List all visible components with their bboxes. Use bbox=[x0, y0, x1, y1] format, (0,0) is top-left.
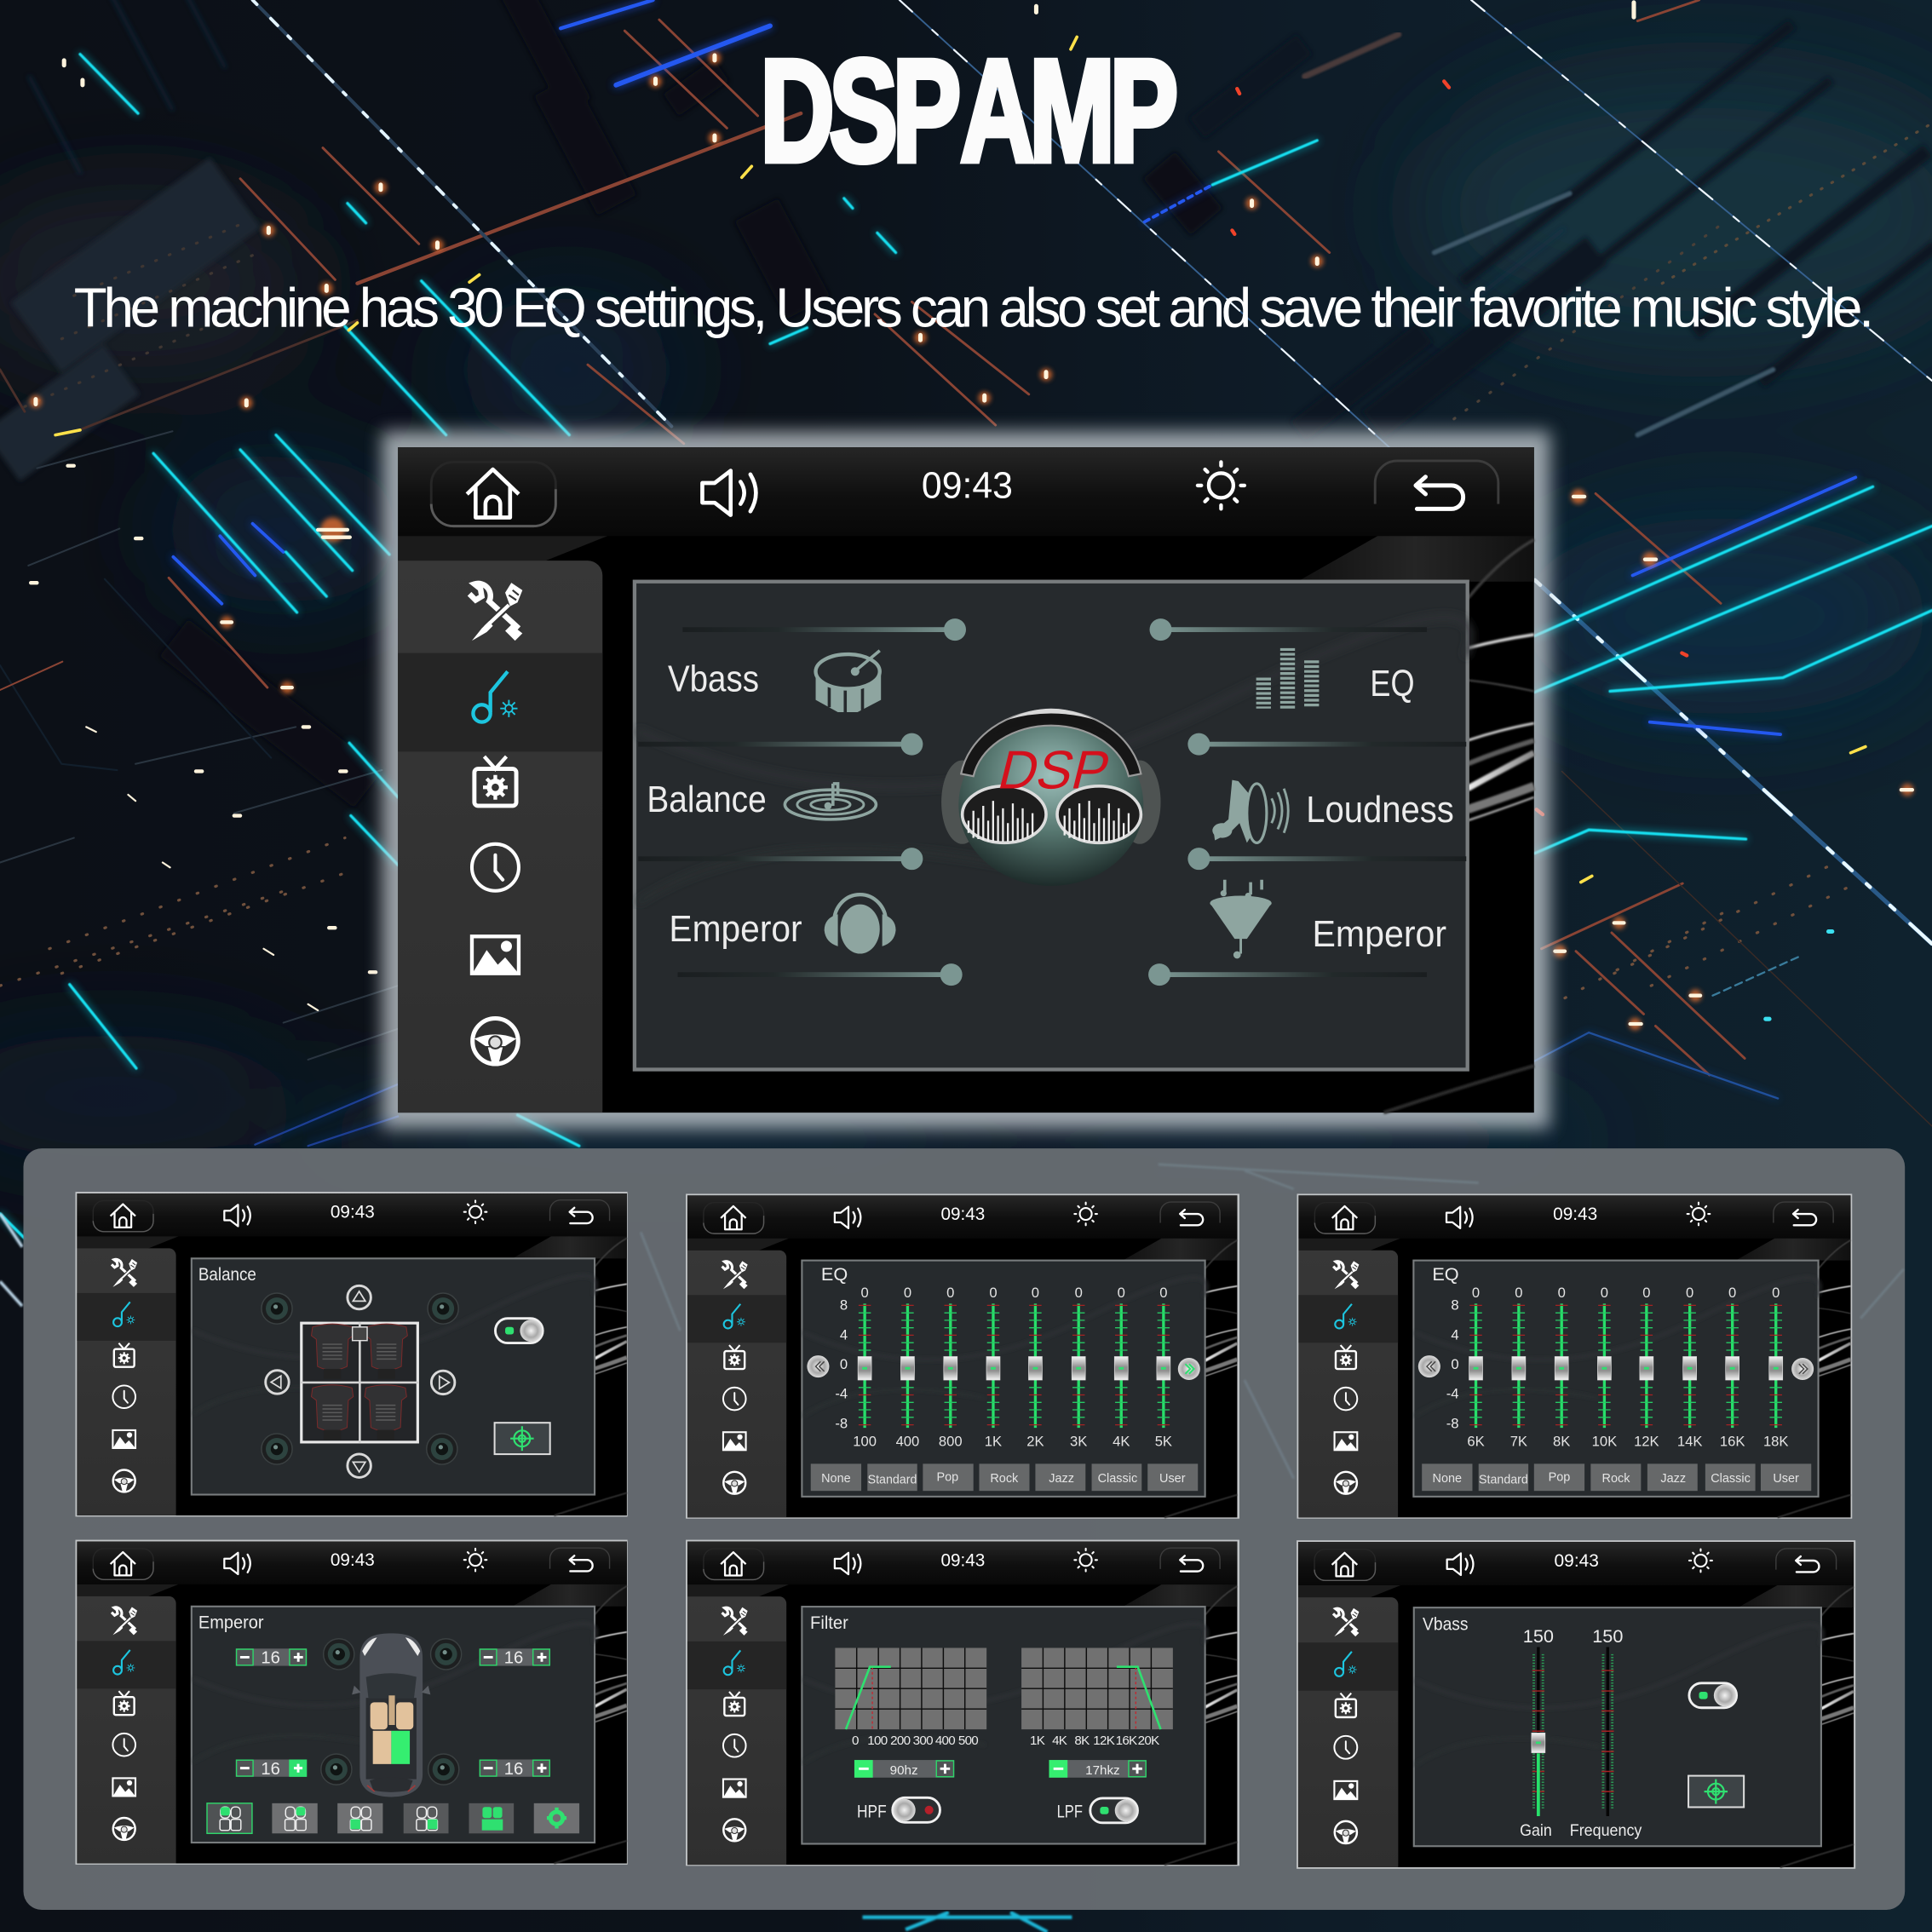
frequency labels: 3K bbox=[1070, 1433, 1087, 1449]
LPF stepper bbox=[1049, 1760, 1146, 1778]
screen: Filter bbox=[687, 1541, 1238, 1865]
band values: 0 bbox=[1075, 1285, 1083, 1301]
dotted copper rows bbox=[0, 124, 1932, 998]
page arrows bbox=[1418, 1355, 1814, 1380]
screen: Vbass: 09:43 bbox=[1555, 1551, 1599, 1571]
HPF switch: HPF bbox=[857, 1800, 887, 1821]
chart axis labels: 200 bbox=[890, 1734, 911, 1748]
band values: 0 bbox=[1772, 1285, 1780, 1301]
chart axis labels: 500 bbox=[958, 1734, 978, 1748]
frequency labels: 100 bbox=[853, 1433, 877, 1449]
high-pass chart bbox=[835, 1647, 986, 1729]
main menu labels: Emperor bbox=[1312, 914, 1446, 955]
dB axis: -4 bbox=[1446, 1386, 1459, 1402]
preset buttons: None bbox=[1433, 1472, 1462, 1486]
volume steppers: 16 bbox=[504, 1760, 523, 1779]
seats diagram bbox=[301, 1322, 419, 1443]
screen: EQ high bands bbox=[1298, 1195, 1851, 1517]
chart axis labels: 400 bbox=[935, 1734, 955, 1748]
direction arrows bbox=[266, 1285, 455, 1477]
band values bbox=[1472, 1285, 1780, 1301]
band values: 0 bbox=[946, 1285, 954, 1301]
dB axis bbox=[835, 1297, 848, 1431]
band values: 0 bbox=[1686, 1285, 1693, 1301]
frequency labels: 5K bbox=[1155, 1433, 1172, 1449]
screen: Balance: 09:43 bbox=[331, 1203, 375, 1222]
sparks bbox=[30, 3, 1913, 1030]
band values: 0 bbox=[1515, 1285, 1522, 1301]
copper traces bbox=[0, 0, 1932, 1126]
dB axis bbox=[1446, 1297, 1459, 1431]
chart axis labels: 12K bbox=[1093, 1734, 1115, 1748]
chart axis labels: 300 bbox=[913, 1734, 933, 1748]
band values: 0 bbox=[1472, 1285, 1480, 1301]
volume steppers bbox=[236, 1648, 550, 1779]
preset buttons: Pop bbox=[936, 1471, 958, 1485]
chart axis labels: 1K bbox=[1030, 1734, 1045, 1748]
chart axis labels: 20K bbox=[1138, 1734, 1159, 1748]
band values: 0 bbox=[860, 1285, 869, 1301]
frequency labels: 7K bbox=[1510, 1433, 1527, 1449]
preset buttons: Standard bbox=[868, 1474, 917, 1487]
screen: EQ low bands: 09:43 bbox=[940, 1205, 985, 1224]
screen: Emperor bbox=[77, 1541, 627, 1864]
frequency labels: 18K bbox=[1763, 1433, 1789, 1449]
frequency slider: Frequency bbox=[1570, 1821, 1642, 1840]
panel: grey backing for thumbnails bbox=[23, 1148, 1905, 1910]
band values: 0 bbox=[989, 1285, 998, 1301]
dotted data lines bbox=[253, 0, 671, 426]
preset buttons: User bbox=[1159, 1472, 1186, 1486]
band values: 0 bbox=[1118, 1285, 1125, 1301]
preset buttons: None bbox=[821, 1472, 851, 1486]
LPF switch: LPF bbox=[1057, 1800, 1083, 1821]
preset buttons bbox=[1422, 1463, 1811, 1491]
faint board traces and blocks bbox=[0, 0, 1932, 808]
screen: Vbass bbox=[1298, 1542, 1854, 1867]
icon: balance rings bbox=[785, 784, 876, 819]
gain slider: Gain bbox=[1520, 1821, 1552, 1840]
dB axis: 4 bbox=[840, 1326, 848, 1343]
frequency labels bbox=[1467, 1433, 1789, 1449]
preset buttons: Standard bbox=[1479, 1474, 1528, 1487]
dB axis: 0 bbox=[1451, 1356, 1459, 1372]
dB axis: 4 bbox=[1451, 1326, 1459, 1343]
LPF stepper: 17hkz bbox=[1085, 1763, 1120, 1778]
main menu labels: Loudness bbox=[1306, 790, 1454, 831]
title: DSP AMP bbox=[760, 30, 1175, 193]
frequency labels: 400 bbox=[896, 1433, 919, 1449]
preset buttons: User bbox=[1773, 1472, 1799, 1486]
screen: EQ low bands: EQ bbox=[821, 1263, 848, 1285]
frequency labels: 8K bbox=[1553, 1433, 1570, 1449]
car top view bbox=[354, 1633, 428, 1797]
band values: 0 bbox=[1601, 1285, 1608, 1301]
gain slider: 150 bbox=[1523, 1625, 1554, 1647]
main menu sliders bbox=[638, 618, 1466, 986]
frequency labels bbox=[853, 1433, 1172, 1449]
HPF switch bbox=[857, 1797, 940, 1822]
page arrows bbox=[807, 1355, 1200, 1380]
chart axis labels: 4K bbox=[1052, 1734, 1067, 1748]
frequency labels: 6K bbox=[1467, 1433, 1485, 1449]
preset buttons: Jazz bbox=[1049, 1472, 1074, 1486]
frequency labels: 14K bbox=[1677, 1433, 1702, 1449]
HPF stepper bbox=[854, 1760, 954, 1778]
main menu labels: EQ bbox=[1370, 664, 1414, 704]
icon: headphones bbox=[825, 894, 896, 954]
screen: EQ low bands bbox=[687, 1195, 1238, 1517]
chart axis labels: 8K bbox=[1074, 1734, 1090, 1748]
frequency labels: 2K bbox=[1026, 1433, 1044, 1449]
main screen: DSP menu bbox=[398, 447, 1534, 1113]
band values: 0 bbox=[1728, 1285, 1736, 1301]
band values: 0 bbox=[1558, 1285, 1566, 1301]
volume steppers: 16 bbox=[504, 1649, 523, 1668]
volume steppers: 16 bbox=[261, 1760, 280, 1779]
screen: EQ high bands: 09:43 bbox=[1553, 1205, 1597, 1224]
main menu labels: Emperor bbox=[669, 909, 802, 950]
main menu labels: Balance bbox=[647, 779, 767, 820]
band values bbox=[860, 1285, 1167, 1301]
frequency labels: 4K bbox=[1113, 1433, 1130, 1449]
preset buttons: Pop bbox=[1549, 1471, 1570, 1485]
screen: Emperor: 09:43 bbox=[331, 1550, 375, 1570]
screen: Balance bbox=[77, 1193, 627, 1515]
band values: 0 bbox=[1032, 1285, 1039, 1301]
dB axis: -8 bbox=[835, 1415, 848, 1431]
screen: EQ high bands: EQ bbox=[1432, 1263, 1459, 1285]
screen: Balance: Balance bbox=[198, 1263, 256, 1285]
preset buttons: Classic bbox=[1711, 1472, 1751, 1486]
frequency labels: 12K bbox=[1634, 1433, 1659, 1449]
HPF stepper: 90hz bbox=[890, 1763, 918, 1778]
chart axis labels: 100 bbox=[867, 1734, 888, 1748]
icon: filter funnel bbox=[1210, 880, 1272, 958]
band values: 0 bbox=[1642, 1285, 1650, 1301]
frequency labels: 10K bbox=[1592, 1433, 1617, 1449]
screen: Emperor: Emperor bbox=[198, 1611, 264, 1632]
preset buttons: Jazz bbox=[1660, 1472, 1686, 1486]
gain slider bbox=[1520, 1625, 1554, 1840]
dB axis: -4 bbox=[835, 1386, 848, 1402]
preset buttons: Rock bbox=[1602, 1472, 1630, 1486]
dB axis: 8 bbox=[1451, 1297, 1459, 1314]
preset buttons bbox=[811, 1463, 1198, 1491]
main menu labels bbox=[647, 658, 1454, 955]
subtitle: The machine has 30 EQ settings, Users can also set and save their favorite music style. bbox=[74, 276, 1871, 338]
dB axis: 0 bbox=[840, 1356, 848, 1372]
chart axis labels bbox=[852, 1734, 1159, 1748]
preset buttons: Rock bbox=[990, 1472, 1019, 1486]
main screen: DSP menu: 09:43 bbox=[922, 465, 1013, 506]
icon: drum bbox=[816, 651, 881, 712]
chart axis labels: 16K bbox=[1116, 1734, 1137, 1748]
glow behind main screen bbox=[382, 431, 1550, 1129]
screen: Vbass: Vbass bbox=[1423, 1613, 1469, 1635]
frequency slider bbox=[1570, 1625, 1642, 1840]
low-pass chart bbox=[1021, 1647, 1173, 1729]
chart axis labels: 0 bbox=[852, 1734, 859, 1748]
screen: Filter: 09:43 bbox=[940, 1550, 985, 1570]
dB axis: 8 bbox=[840, 1297, 848, 1314]
band values: 0 bbox=[904, 1285, 911, 1301]
dB axis: -8 bbox=[1446, 1415, 1459, 1431]
volume steppers: 16 bbox=[261, 1649, 280, 1668]
frequency labels: 800 bbox=[939, 1433, 963, 1449]
LPF switch bbox=[1057, 1798, 1137, 1823]
frequency labels: 1K bbox=[985, 1433, 1002, 1449]
band values: 0 bbox=[1159, 1285, 1167, 1301]
screen: Filter: Filter bbox=[810, 1612, 848, 1633]
icon: loudness speaker bbox=[1212, 780, 1288, 842]
icon: DSP head with headphones bbox=[941, 709, 1161, 886]
frequency labels: 16K bbox=[1720, 1433, 1745, 1449]
main menu labels: Vbass bbox=[668, 658, 759, 699]
icon: equaliser bars bbox=[1263, 648, 1312, 709]
frequency slider: 150 bbox=[1592, 1625, 1623, 1647]
preset buttons: Classic bbox=[1098, 1472, 1137, 1486]
icon: DSP head with headphones: DSP bbox=[992, 740, 1116, 801]
seat selection buttons bbox=[207, 1803, 579, 1833]
